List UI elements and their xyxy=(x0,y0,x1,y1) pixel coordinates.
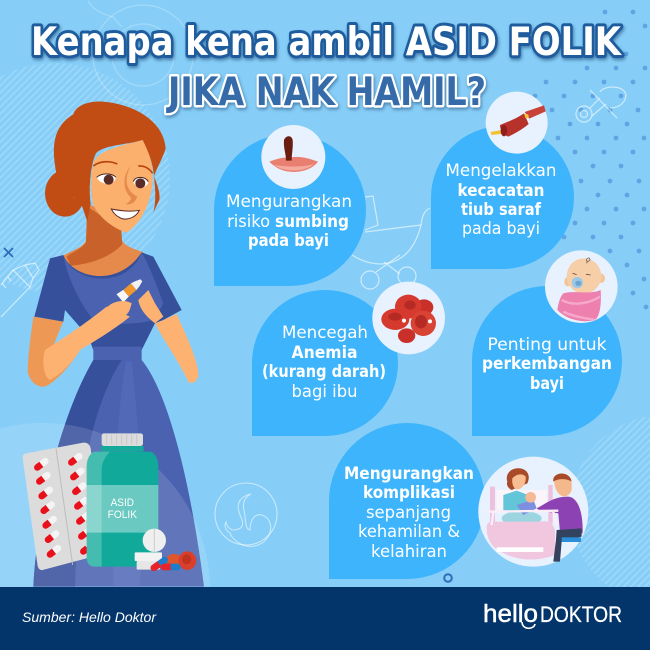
outline: embryo xyxy=(215,483,277,546)
right arm xyxy=(155,314,198,383)
text: sumbing: pada bayi xyxy=(248,231,329,250)
dress bodice xyxy=(63,252,163,324)
text: anemia: (kurang darah) xyxy=(262,362,386,381)
outline: stroller xyxy=(352,196,430,289)
text: tiub saraf: pada bayi xyxy=(462,219,540,238)
text: komplikasi: sepanjang xyxy=(366,503,451,522)
icon: cleft lip xyxy=(261,125,325,189)
face xyxy=(91,140,153,233)
mouth xyxy=(111,209,139,219)
eyebrows xyxy=(93,162,153,173)
icon: family in hospital xyxy=(478,457,588,567)
panel: komplikasi xyxy=(329,423,588,579)
icon: baby xyxy=(545,250,618,323)
blister pack xyxy=(23,443,105,570)
text: anemia: bagi ibu xyxy=(292,382,358,401)
text: sumbing: sumbing xyxy=(275,212,349,231)
text: komplikasi: Mengurangkan xyxy=(344,464,474,483)
text: tiub saraf: tiub saraf xyxy=(461,200,542,219)
outline: baby bottle xyxy=(1,263,39,317)
supplements group xyxy=(23,433,196,572)
text: komplikasi: kehamilan & xyxy=(358,522,460,541)
neck and chest xyxy=(62,203,143,280)
logo: hello xyxy=(483,600,538,628)
hair bun xyxy=(45,170,85,217)
woman xyxy=(28,102,204,587)
forearm left xyxy=(43,307,130,380)
text: anemia: Anemia xyxy=(292,343,358,362)
striped circle bottom right xyxy=(570,416,650,587)
source text: Sumber: Hello Doktor xyxy=(22,610,157,625)
bottle label xyxy=(108,497,137,521)
text: perkembangan: perkembangan xyxy=(482,354,612,373)
bottle label: ASID xyxy=(111,497,134,509)
text: perkembangan: Penting untuk xyxy=(488,335,607,354)
logo xyxy=(483,600,622,628)
text: komplikasi: kelahiran xyxy=(371,542,447,561)
text: komplikasi: komplikasi xyxy=(363,483,455,502)
text: anemia: Mencegah xyxy=(282,323,368,342)
translucent circle overlay xyxy=(0,423,210,587)
icon: red blood cells xyxy=(372,282,445,354)
bottle xyxy=(87,433,158,567)
dress sleeves and dark bodice xyxy=(34,252,182,350)
text: sumbing xyxy=(226,192,352,250)
loose pills xyxy=(135,529,196,572)
skirt xyxy=(33,347,204,587)
outline: egg and sperm xyxy=(88,1,193,105)
text: sumbing: risiko xyxy=(227,212,270,231)
panel: anemia xyxy=(252,282,445,436)
panel: tiub saraf xyxy=(431,92,574,269)
bottle label: FOLIK xyxy=(108,509,137,521)
footer bar xyxy=(0,587,650,650)
text: anemia xyxy=(262,323,386,401)
text: tiub saraf: Mengelakkan xyxy=(446,161,556,180)
text: perkembangan xyxy=(482,335,612,393)
text: sumbing: Mengurangkan xyxy=(226,192,352,211)
text: tiub saraf: kecacatan xyxy=(458,181,544,200)
ear xyxy=(71,181,87,200)
hands xyxy=(105,290,163,323)
hair xyxy=(54,102,166,222)
nose xyxy=(124,166,137,204)
striped circle behind woman xyxy=(0,63,170,293)
upper left arm xyxy=(28,317,80,387)
outline: pacifier xyxy=(576,87,626,122)
icon: cross xyxy=(4,248,13,257)
eyes xyxy=(97,174,148,188)
text: perkembangan: bayi xyxy=(530,374,564,393)
tube xyxy=(117,276,145,302)
icon: nerve xyxy=(486,92,548,154)
text: tiub saraf xyxy=(446,161,556,238)
title line 2: JIKA NAK HAMIL? xyxy=(165,70,486,115)
panel: sumbing xyxy=(214,125,366,286)
title xyxy=(31,20,623,115)
dot pattern xyxy=(533,10,648,309)
logo: DOKTOR xyxy=(540,602,622,627)
small ring xyxy=(444,574,452,582)
text: komplikasi xyxy=(344,464,474,561)
panel: perkembangan xyxy=(472,250,622,436)
